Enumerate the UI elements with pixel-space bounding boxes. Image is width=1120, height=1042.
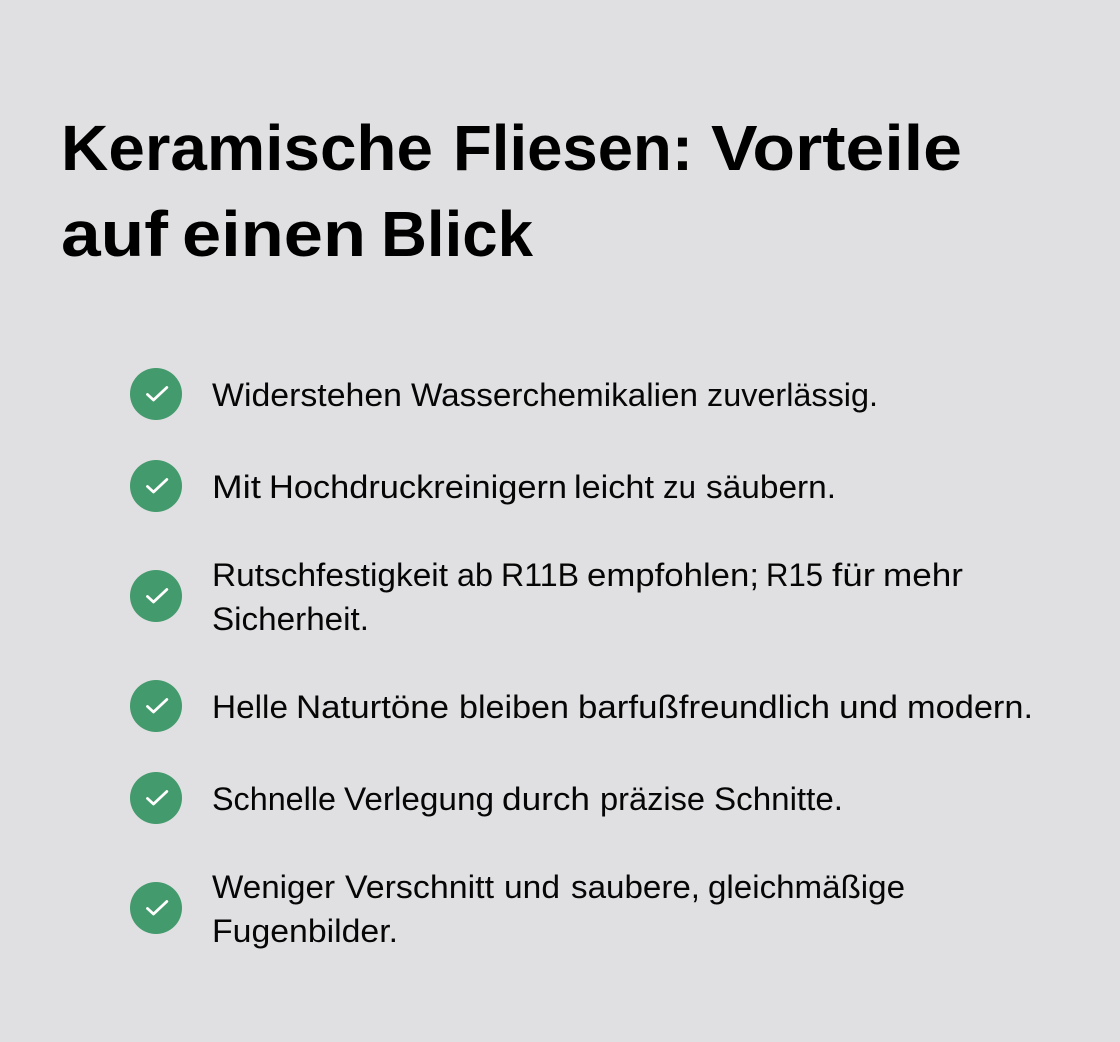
item: natural tones: modern.: [907, 689, 1033, 725]
item: cleaning: Hochdruckreinigern: [269, 469, 567, 505]
item: fast installation: präzise: [600, 781, 705, 817]
item: water chemicals: Wasserchemikalien: [411, 377, 698, 413]
item: water chemicals: [130, 368, 878, 420]
title: Blick: [381, 198, 533, 270]
item: slip resistance: R15: [766, 557, 823, 593]
item: cleaning: [130, 460, 836, 512]
item: natural tones: Naturtöne: [296, 689, 449, 725]
item: slip resistance: Rutschfestigkeit: [212, 557, 448, 593]
item: natural tones: barfußfreundlich: [578, 689, 830, 725]
title: auf: [61, 198, 169, 270]
item: fast installation: Verlegung: [344, 781, 494, 817]
item: fast installation: [130, 772, 843, 824]
item: natural tones: bleiben: [459, 689, 569, 725]
item: slip resistance: Sicherheit.: [212, 601, 369, 637]
item: fast installation: Schnelle: [212, 781, 336, 817]
item: natural tones: und: [839, 689, 898, 725]
title: Vorteile: [711, 112, 962, 184]
item: cleaning: Mit: [212, 469, 261, 505]
title: Keramische: [61, 112, 433, 184]
item: fast installation: durch: [502, 781, 590, 817]
item: slip resistance: mehr: [883, 557, 963, 593]
list of advantages: [130, 368, 1033, 949]
item: natural tones: Helle: [212, 689, 288, 725]
title: [61, 112, 962, 270]
item: cleaning: zu: [663, 469, 696, 505]
item: less waste: [130, 869, 905, 949]
item: slip resistance: empfohlen;: [587, 557, 759, 593]
item: less waste: und: [504, 869, 560, 905]
title: einen: [182, 198, 366, 270]
item: slip resistance: ab: [457, 557, 493, 593]
item: less waste: Weniger: [212, 869, 335, 905]
item: less waste: gleichmäßige: [708, 869, 905, 905]
item: water chemicals: Widerstehen: [212, 377, 402, 413]
item: water chemicals: zuverlässig.: [707, 377, 878, 413]
item: cleaning: säubern.: [706, 469, 836, 505]
item: slip resistance: für: [832, 557, 875, 593]
title: Fliesen:: [453, 112, 693, 184]
item: fast installation: Schnitte.: [714, 781, 843, 817]
item: slip resistance: [130, 557, 963, 637]
item: natural tones: [130, 680, 1033, 732]
item: cleaning: leicht: [574, 469, 654, 505]
item: slip resistance: R11B: [501, 557, 579, 593]
item: less waste: saubere,: [571, 869, 700, 905]
item: less waste: Verschnitt: [345, 869, 494, 905]
item: less waste: Fugenbilder.: [212, 913, 398, 949]
